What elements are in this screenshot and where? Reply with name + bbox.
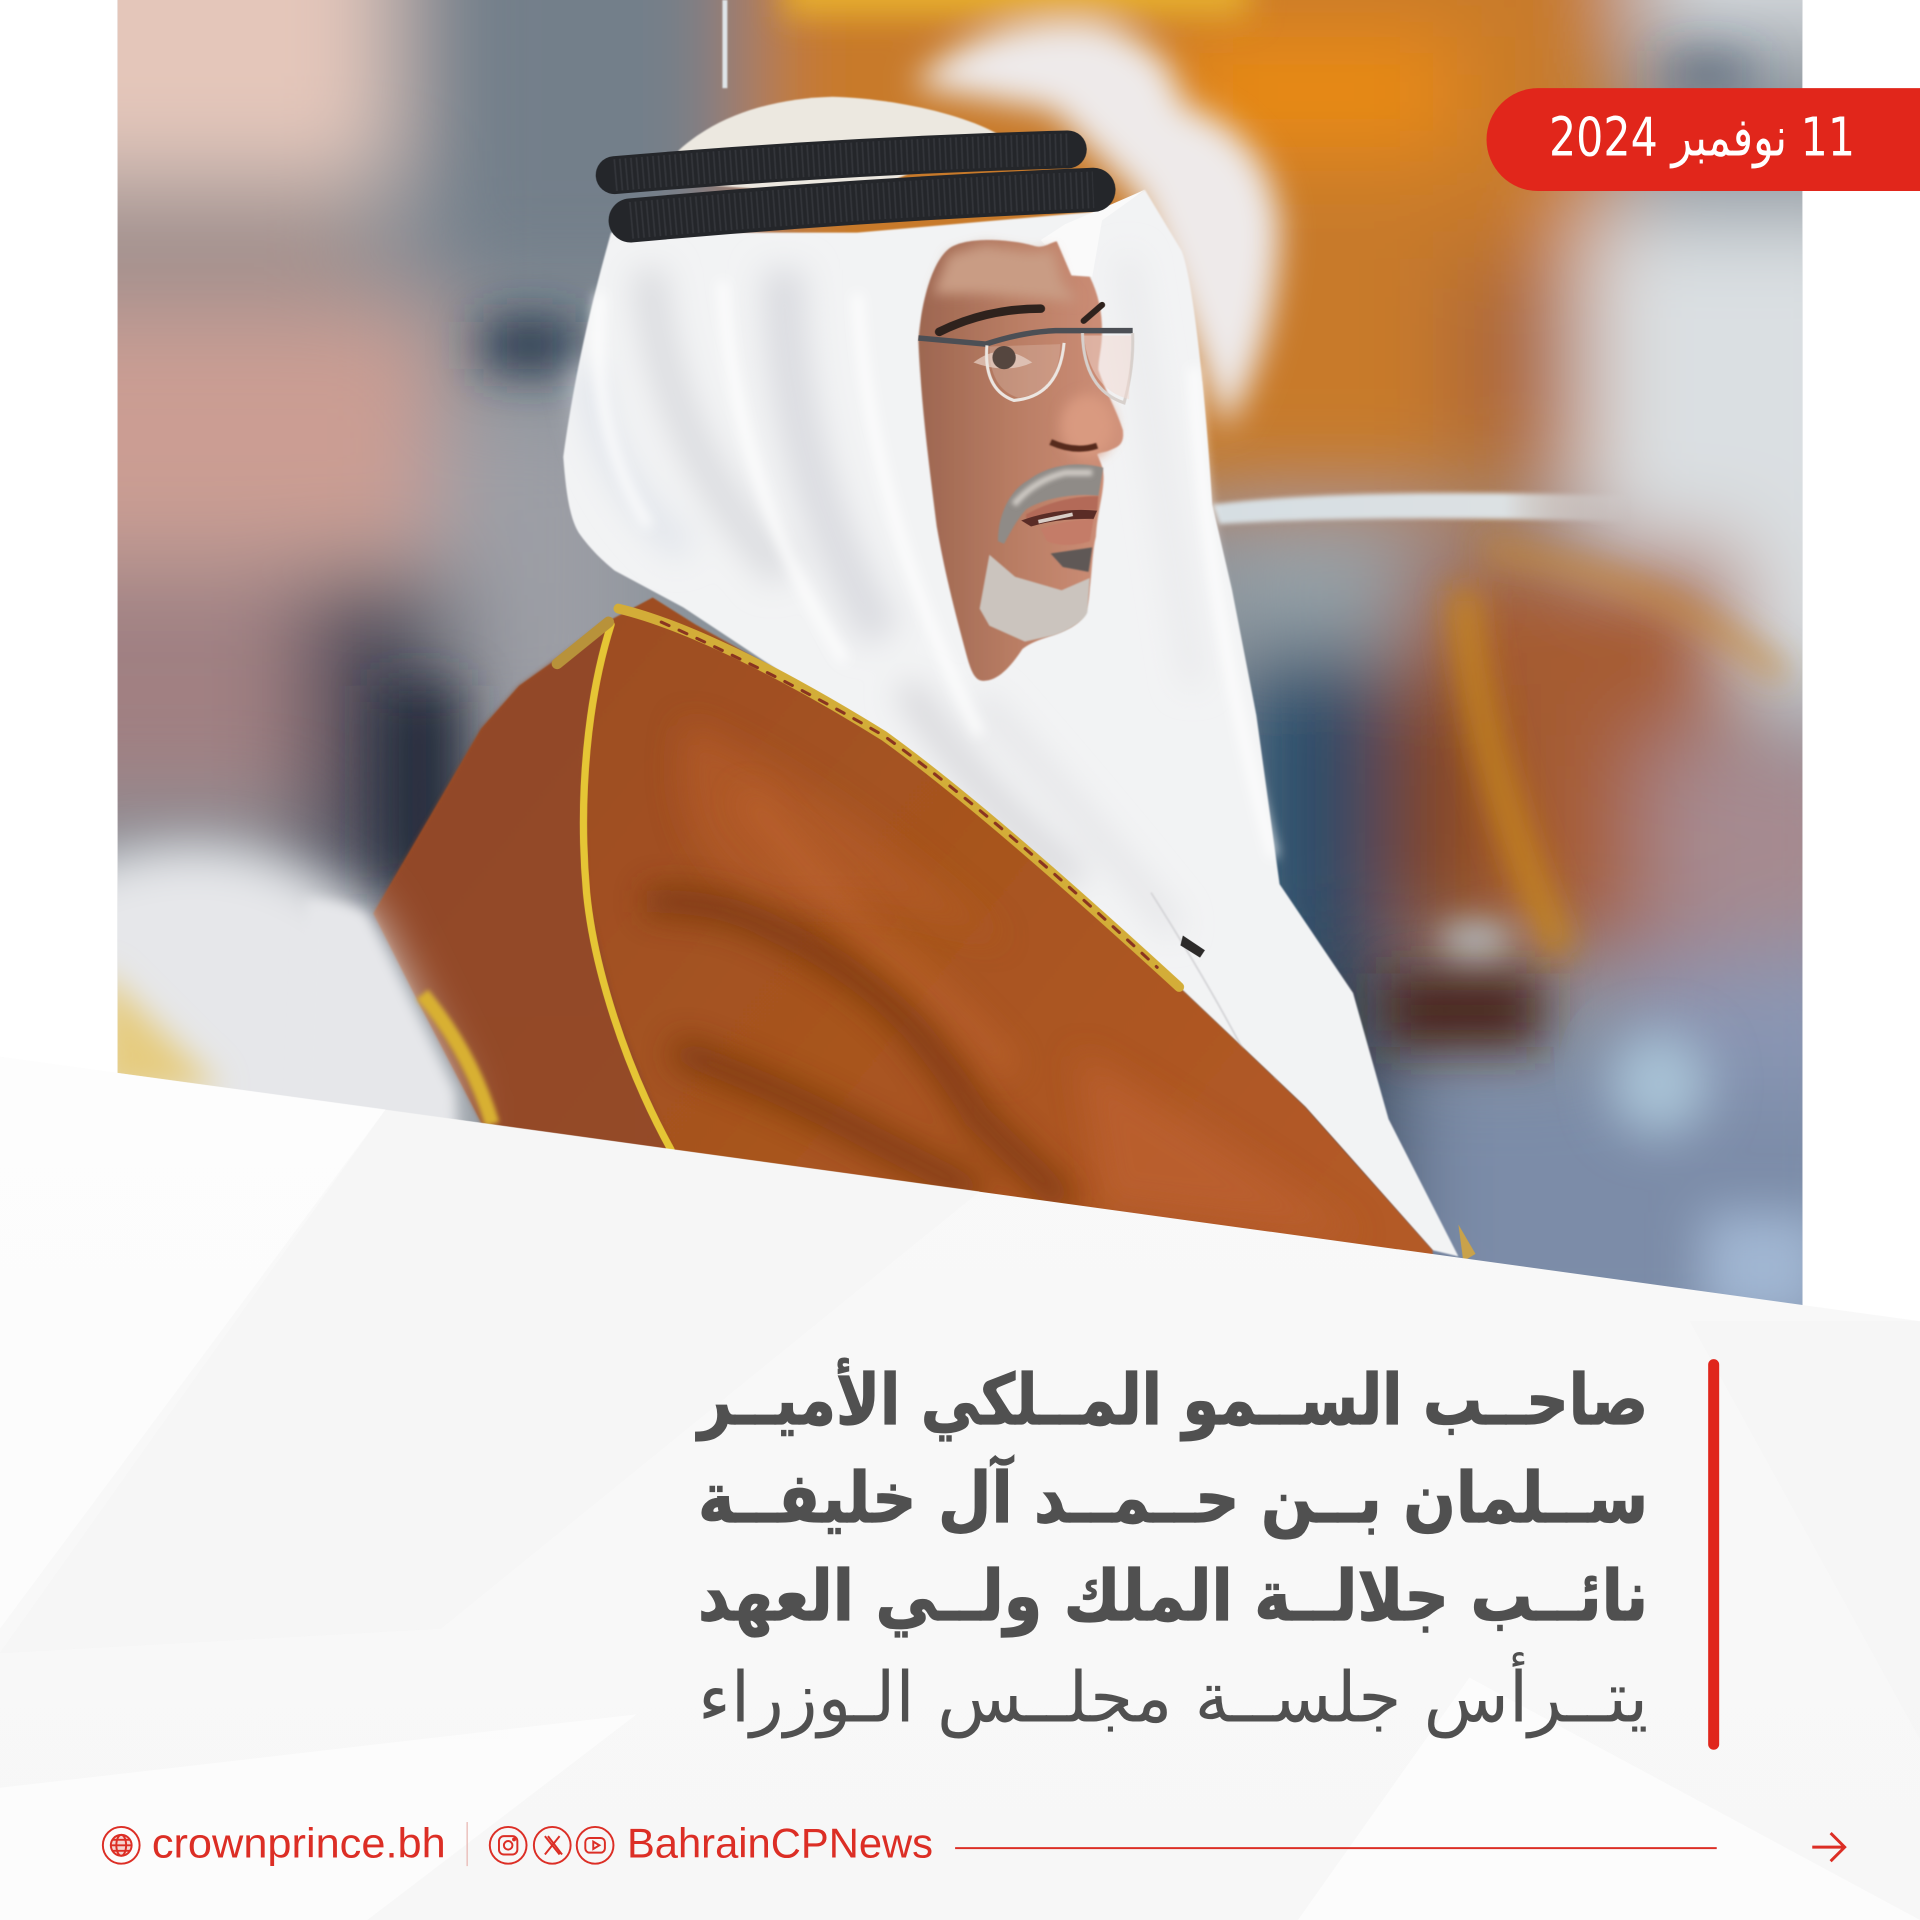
icon: globe (103, 1827, 140, 1864)
headline: name and title (695, 1358, 1648, 1739)
divider (467, 1822, 468, 1866)
white ghutra headdress (563, 97, 1458, 1256)
date badge: 11 نوفمبر 2024 (1549, 106, 1855, 169)
headline line 1: صاحــب الســمو المــلكي الأميــر (695, 1358, 1648, 1441)
gold trim on robe (557, 609, 1179, 1150)
face in profile (918, 240, 1133, 681)
website: crownprince.bh (152, 1820, 446, 1867)
headline line 4: light weight: يتــرأس جلســة مجلــس الـوزراء (698, 1652, 1648, 1739)
blurred photo background (118, 0, 1802, 1305)
footer bar (103, 1820, 1845, 1867)
arrow (1812, 1833, 1845, 1861)
date badge (1487, 88, 1920, 191)
red vertical accent bar (1708, 1359, 1719, 1750)
eyebrows (939, 305, 1102, 332)
dark fabric tips (1180, 936, 1205, 958)
lower white angled panel (0, 1057, 1920, 1920)
social handle: BahrainCPNews (627, 1820, 933, 1867)
moustache, mouth and beard (980, 464, 1103, 642)
footer rule (955, 1847, 1717, 1849)
icon: x (534, 1827, 571, 1864)
headline line 2: ســلمان بــن حــمــد آل خليفــة (698, 1455, 1648, 1539)
blurred foreground person in white (118, 815, 502, 1125)
glasses (918, 331, 1133, 403)
brown bisht robe (373, 598, 1433, 1273)
eye (973, 346, 1032, 369)
photo: crown prince in profile (118, 0, 1802, 1305)
gold fringe at robe hem (1458, 1224, 1476, 1261)
icon: instagram (490, 1827, 527, 1864)
icon: youtube (577, 1827, 613, 1864)
black egal rope (615, 149, 1093, 220)
headline line 3: نائــب جلالــة الملك ولــي العهد (698, 1556, 1648, 1637)
